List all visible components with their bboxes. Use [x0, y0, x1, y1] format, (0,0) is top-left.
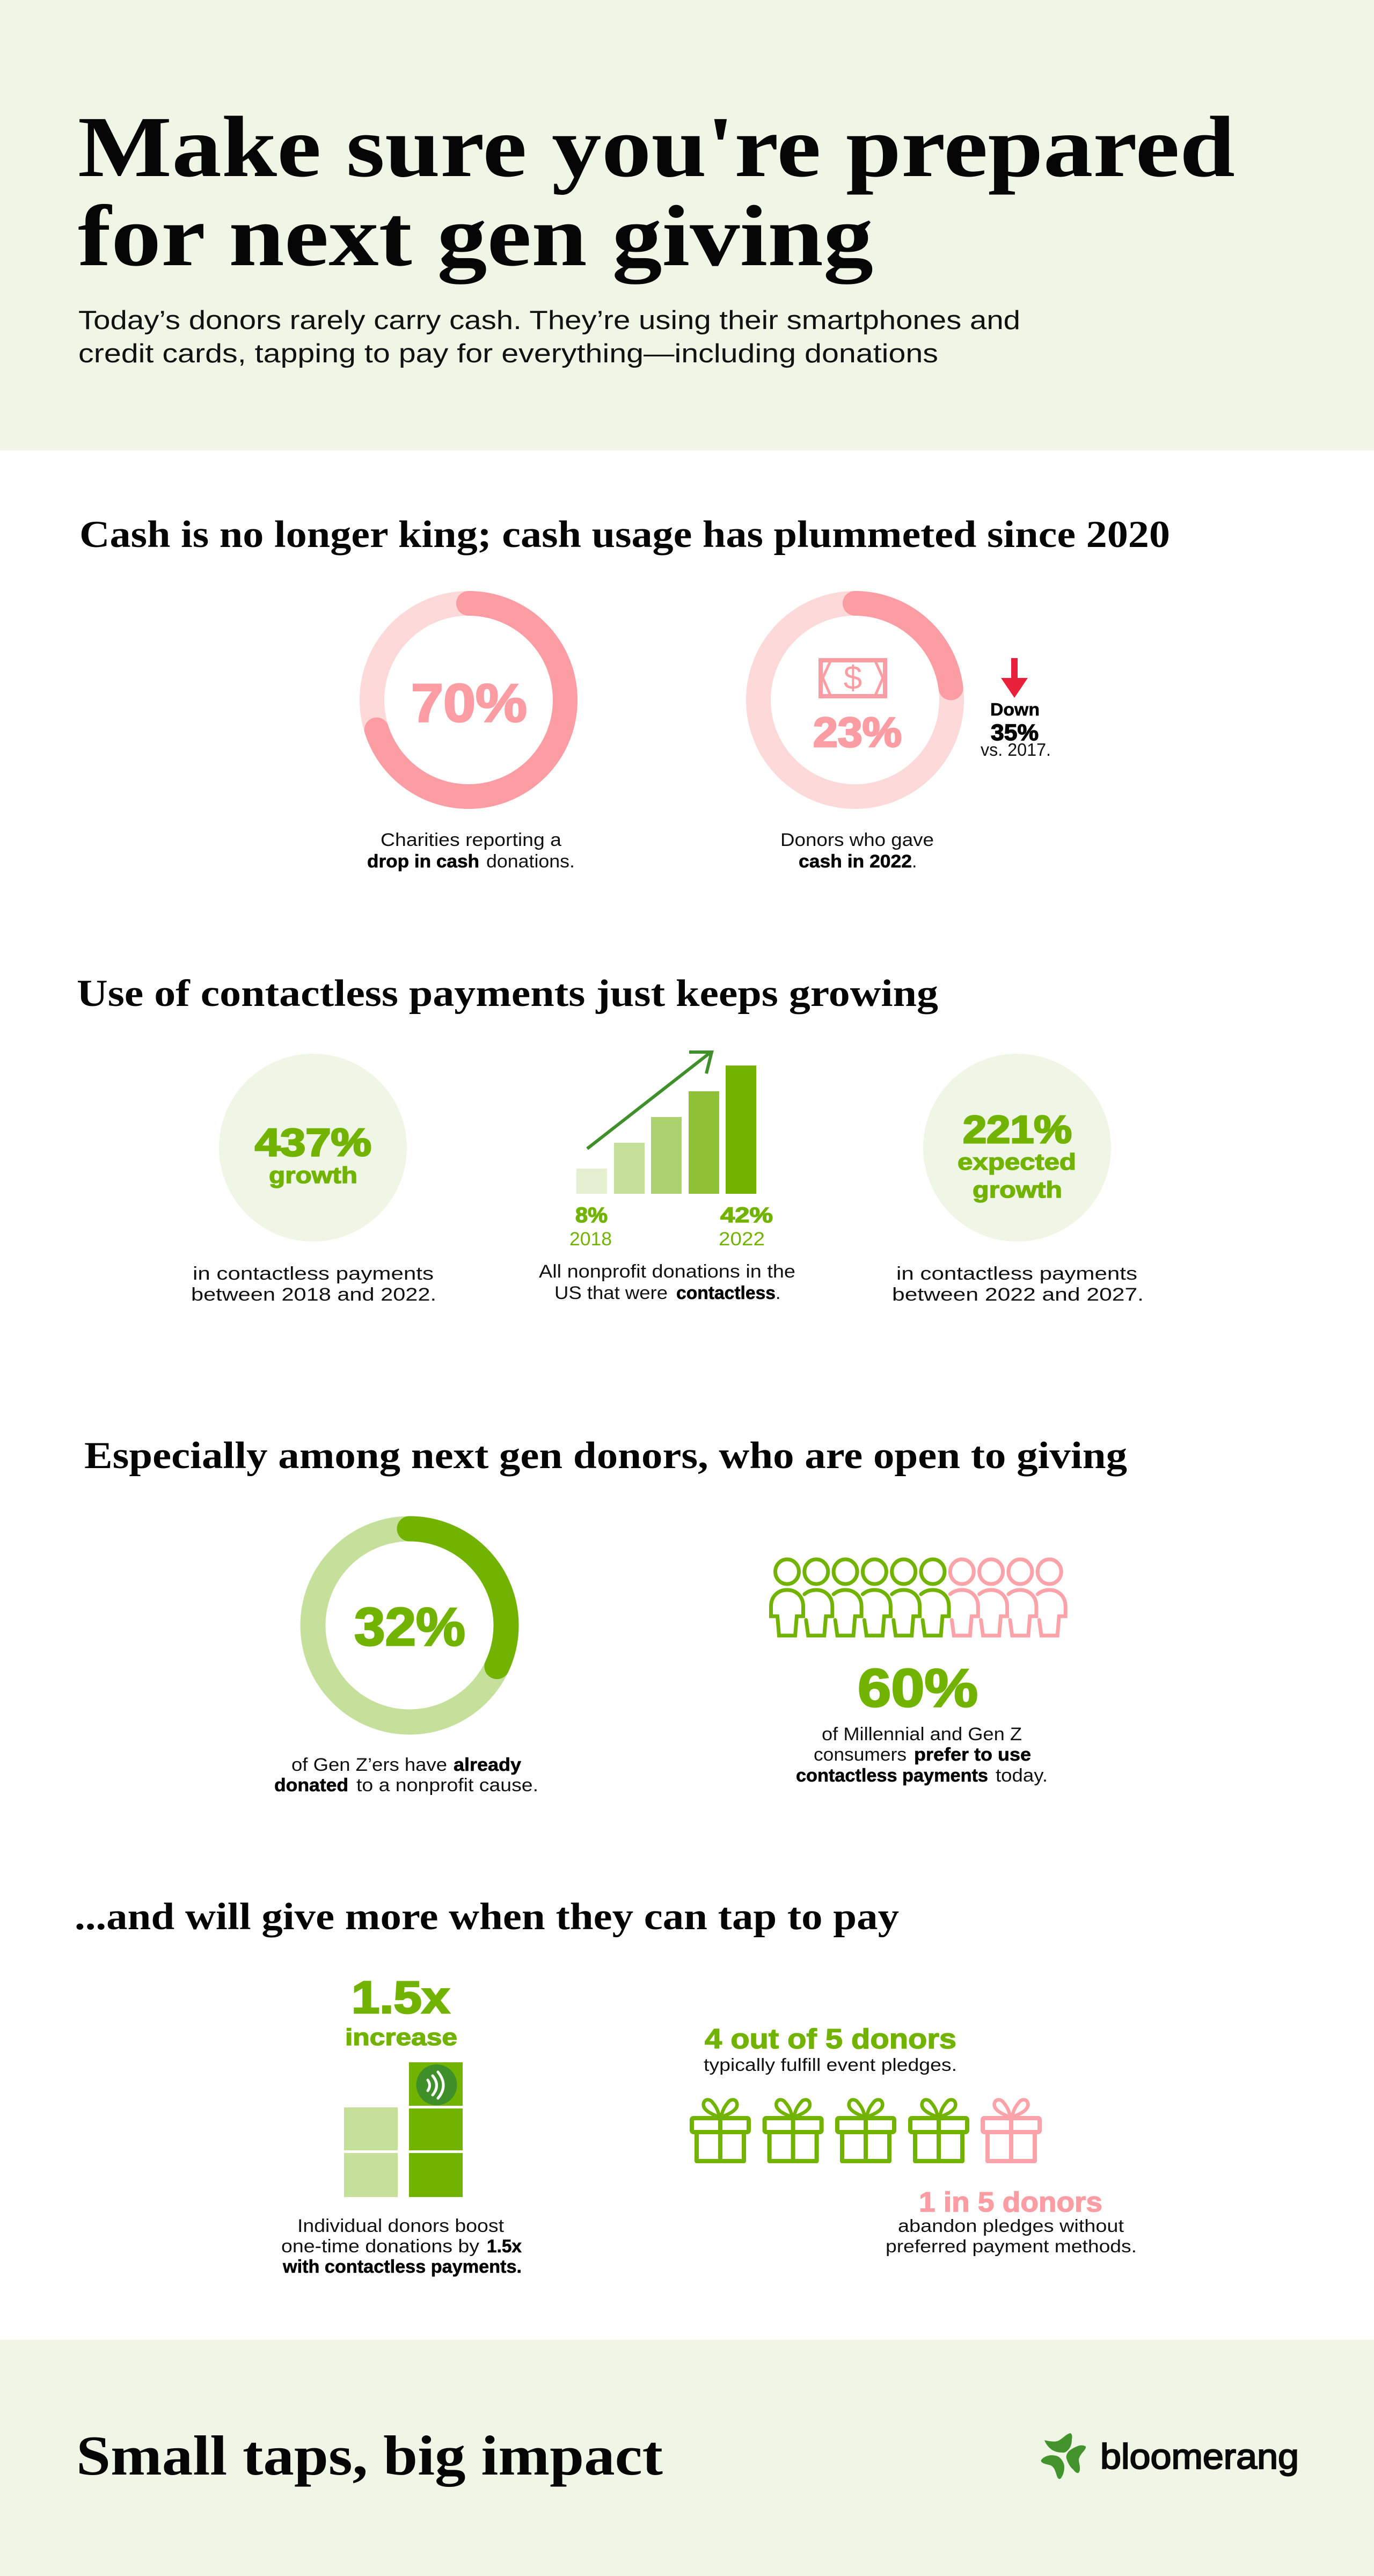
caption: 60%: prefer to use [914, 1745, 1031, 1765]
stat: 4 out of 5 donors: typically fulfill event pledges. [704, 2055, 957, 2075]
caption: charities: donations. [486, 851, 575, 872]
heading: cash is no longer king: Cash is no longer king; cash usage has plummeted since 2020 [79, 514, 1170, 556]
icon: dollar bill: $ [844, 660, 862, 697]
circle: 437% growth [219, 1054, 407, 1242]
caption: 32%: to a nonprofit cause. [356, 1775, 538, 1796]
caption: 60% [796, 1724, 1048, 1786]
bar chart: contactless share: 2022 [719, 1229, 765, 1250]
stat: 4 out of 5 donors: 4 out of 5 donors [705, 2024, 956, 2055]
title [78, 99, 1235, 284]
bar chart: contactless share [569, 1052, 773, 1250]
callout: down 35%: vs. 2017. [981, 740, 1051, 760]
circle: 221% expected growth [923, 1054, 1111, 1242]
stat: 60%: 60% [858, 1658, 978, 1718]
caption: donors who gave: Donors who gave [780, 830, 934, 850]
circle: 437% growth: 437% [255, 1121, 371, 1164]
caption: 32%: of Gen Z’ers have [291, 1755, 447, 1775]
caption: 437% [191, 1264, 436, 1305]
bar chart: contactless share: 2018 [569, 1229, 612, 1250]
icon: dollar bill [821, 660, 885, 697]
donut: 23% donors [758, 603, 952, 797]
caption: 221%: between 2022 and 2027. [892, 1285, 1144, 1305]
caption: 60%: contactless payments [796, 1765, 988, 1786]
callout: down 35% [981, 699, 1051, 760]
intro text [78, 306, 1020, 368]
caption: 437%: between 2018 and 2022. [191, 1285, 436, 1305]
stat: 1 in 5 donors [886, 2187, 1137, 2256]
caption: 1.5x: Individual donors boost [297, 2216, 505, 2236]
donut: 23% donors: 23% [813, 709, 902, 756]
caption: donors who gave: . [912, 851, 917, 872]
caption: 1.5x: 1.5x [487, 2236, 522, 2257]
stat: 1 in 5 donors: 1 in 5 donors [919, 2187, 1102, 2218]
icon: row of five gifts [692, 2100, 1040, 2161]
heading: tap to pay: ...and will give more when they can tap to pay [75, 1896, 899, 1938]
caption: charities [367, 830, 575, 872]
intro text: credit cards, tapping to pay for everything—including donations [78, 339, 938, 368]
circle: 221% expected growth: 221% [963, 1108, 1072, 1151]
donut: 32% gen z [313, 1529, 506, 1722]
icon: contactless tap [416, 2064, 457, 2105]
caption: 221% [892, 1264, 1144, 1305]
bar chart: contactless share: 42% [720, 1203, 773, 1227]
icon: row of ten people [771, 1559, 1065, 1636]
caption: 1.5x: one-time donations by [281, 2236, 479, 2257]
circle: 437% growth: growth [269, 1163, 357, 1188]
caption: 60%: today. [996, 1765, 1048, 1786]
donut: 32% gen z: 32% [354, 1597, 465, 1657]
caption: 1.5x: with contactless payments. [282, 2257, 522, 2277]
caption: 221%: in contactless payments [896, 1264, 1137, 1284]
heading: contactless growing: Use of contactless payments just keeps growing [77, 973, 938, 1015]
caption: 32%: donated [274, 1775, 348, 1796]
donut: 70% charities: 70% [411, 673, 527, 733]
intro text: Today’s donors rarely carry cash. They’re using their smartphones and [78, 306, 1020, 335]
caption: bar chart: All nonprofit donations in the [539, 1261, 795, 1282]
caption: donors who gave [780, 830, 934, 872]
callout: down 35%: Down [990, 699, 1040, 719]
caption: charities: drop in cash [367, 851, 479, 872]
caption: bar chart: US that were [554, 1283, 668, 1303]
caption: 60%: of Millennial and Gen Z [822, 1724, 1022, 1745]
chart: stacked donation blocks [344, 2062, 463, 2197]
arrow: down [1001, 658, 1028, 698]
panel: header [0, 0, 1374, 450]
caption: 32% [274, 1755, 538, 1796]
caption: donors who gave: cash in 2022 [799, 851, 912, 872]
stat: 1.5x increase [345, 1972, 457, 2050]
stat: 4 out of 5 donors [704, 2024, 957, 2075]
panel: footer [0, 2340, 1374, 2576]
arrow: growth trend [587, 1052, 712, 1149]
title: Make sure you're prepared [78, 99, 1235, 195]
bar chart: contactless share: 8% [575, 1203, 608, 1227]
heading: next gen donors: Especially among next gen donors, who are open to giving [84, 1435, 1127, 1477]
circle: 221% expected growth: growth [973, 1177, 1062, 1203]
stat: 1.5x increase: increase [345, 2024, 457, 2050]
footer tagline: Small taps, big impact [76, 2424, 663, 2487]
caption: bar chart: contactless [676, 1283, 776, 1303]
caption: charities: Charities reporting a [381, 830, 561, 850]
caption: 437%: in contactless payments [193, 1264, 434, 1284]
title: for next gen giving [78, 188, 873, 284]
stat: 1 in 5 donors: abandon pledges without [898, 2216, 1124, 2236]
caption: bar chart: . [776, 1283, 780, 1303]
circle: 221% expected growth: expected [958, 1149, 1076, 1175]
callout: down 35%: 35% [991, 720, 1039, 746]
stat: 1 in 5 donors: preferred payment methods. [886, 2236, 1137, 2256]
logo: bloomerang [1041, 2433, 1299, 2479]
logo: bloomerang: bloomerang [1100, 2436, 1299, 2476]
donut: 70% charities [372, 603, 565, 797]
caption: 1.5x [281, 2216, 522, 2277]
caption: 60%: consumers [814, 1745, 907, 1765]
caption: 32%: already [454, 1755, 521, 1775]
stat: 1.5x increase: 1.5x [352, 1972, 450, 2023]
caption: bar chart [539, 1261, 795, 1303]
